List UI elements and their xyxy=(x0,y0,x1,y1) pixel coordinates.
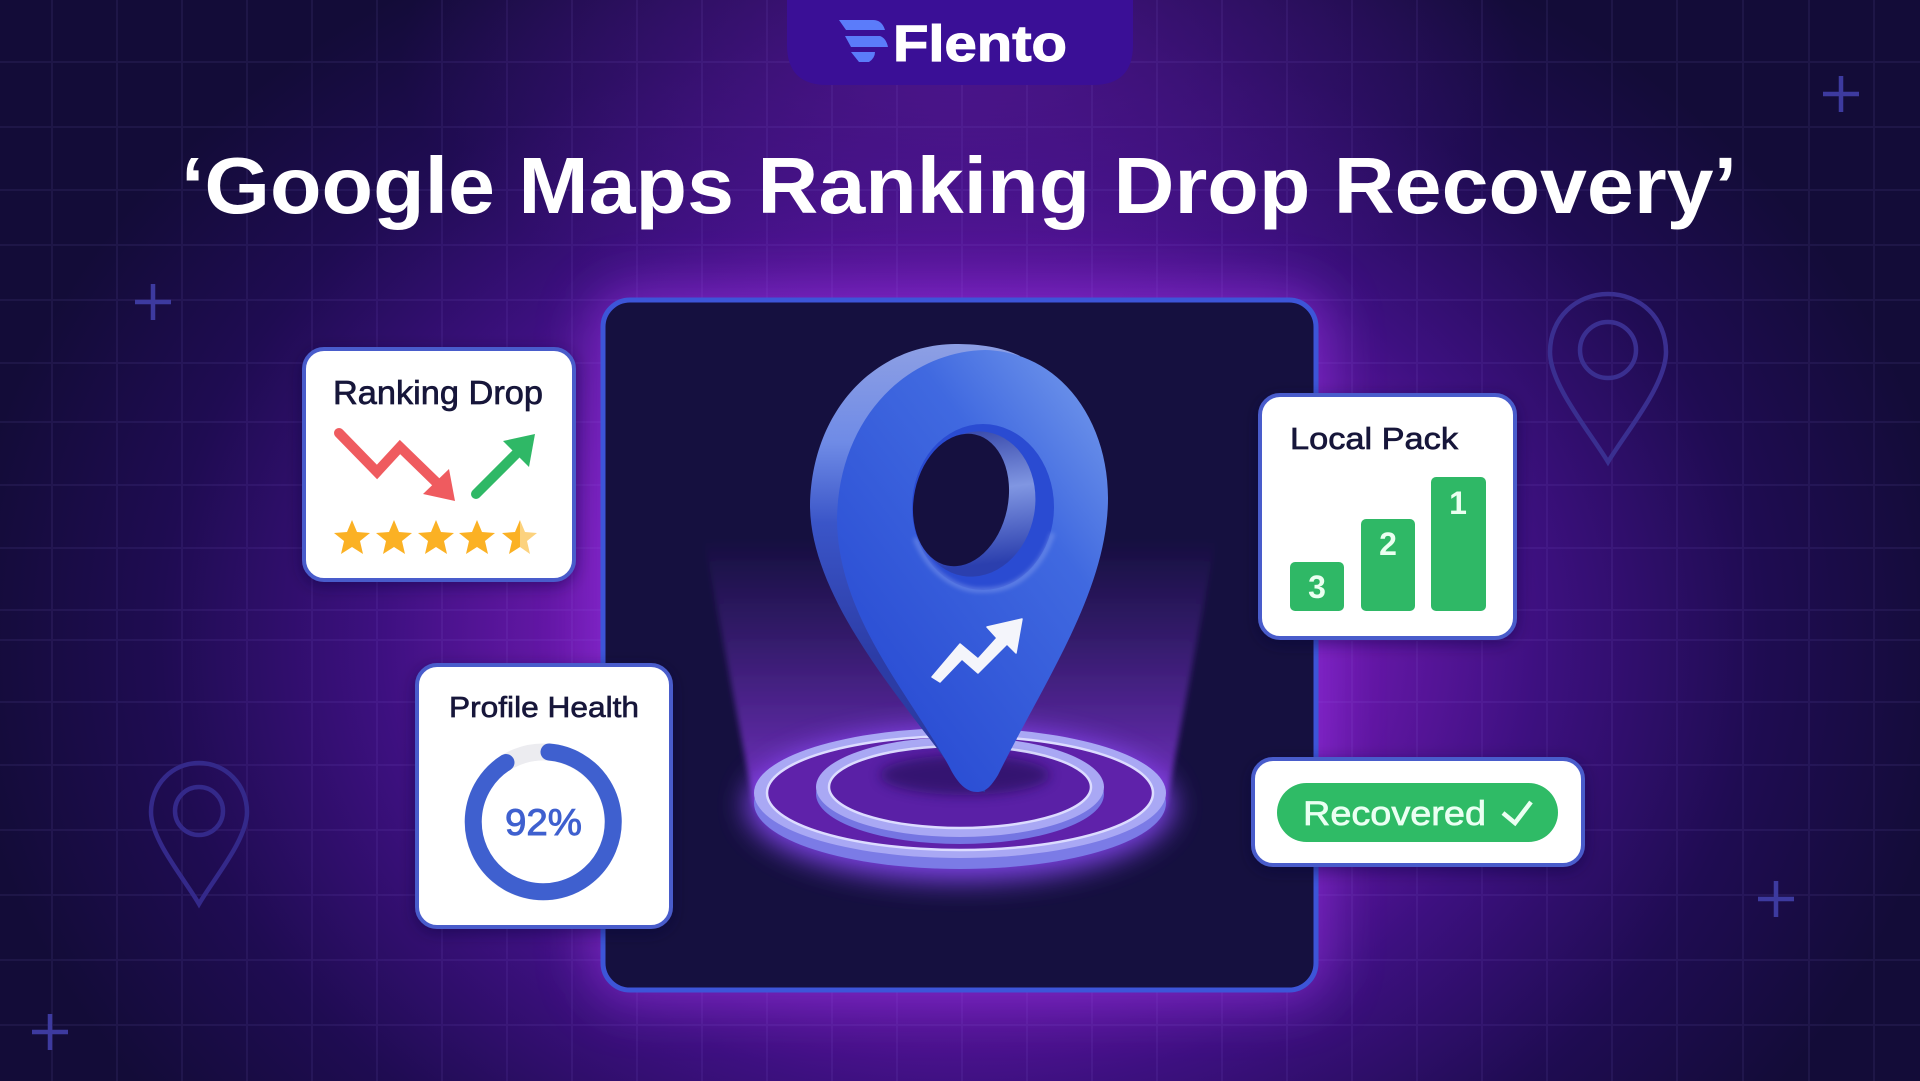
card: recovered xyxy=(1253,759,1583,865)
bar: rank 2 xyxy=(1361,519,1415,611)
card heading: Ranking Drop xyxy=(333,374,543,411)
card: ranking drop xyxy=(304,349,574,580)
glowing rings xyxy=(746,728,1174,881)
star rating xyxy=(334,520,537,554)
decorative plus: lower right xyxy=(1758,881,1794,917)
bar: rank 3 xyxy=(1290,562,1344,611)
pin hole inner wall xyxy=(903,422,1047,586)
title: ‘Google Maps Ranking Drop Recovery’ xyxy=(181,141,1737,230)
decorative plus: top right xyxy=(1823,76,1859,112)
pin hole xyxy=(901,425,1021,575)
light beam xyxy=(710,558,1210,812)
location pin xyxy=(810,344,1108,792)
bar: rank 3: 3 xyxy=(1308,569,1326,605)
logo tab xyxy=(787,0,1133,85)
decorative plus: bottom left xyxy=(32,1014,68,1050)
percentage: 92% xyxy=(505,802,582,843)
icon: trend arrow xyxy=(932,619,1022,682)
icon: logo bars xyxy=(839,20,888,62)
logo wordmark: Flento xyxy=(893,15,1067,72)
icon: red down arrow xyxy=(339,433,455,501)
icon: green up arrow xyxy=(476,434,535,494)
panel glow xyxy=(590,288,1330,1003)
bar: rank 1 xyxy=(1431,477,1486,611)
card: profile health xyxy=(417,665,671,927)
status pill xyxy=(1277,783,1558,842)
card heading: Local Pack xyxy=(1290,421,1459,456)
pin hole rim xyxy=(912,424,1054,590)
central panel xyxy=(603,300,1316,990)
progress ring value xyxy=(473,752,613,892)
progress ring track xyxy=(473,752,613,892)
card: local pack xyxy=(1260,395,1515,638)
bar: rank 2: 2 xyxy=(1379,526,1397,562)
icon: check mark xyxy=(1503,802,1531,823)
decorative plus: upper left xyxy=(135,284,171,320)
card heading: Profile Health xyxy=(449,692,639,724)
pin rim highlight xyxy=(916,535,1052,590)
decorative outline pin: left xyxy=(151,763,247,904)
decorative outline pin: right xyxy=(1550,294,1666,462)
status label: Recovered xyxy=(1303,795,1486,833)
bar: rank 1: 1 xyxy=(1449,485,1467,521)
